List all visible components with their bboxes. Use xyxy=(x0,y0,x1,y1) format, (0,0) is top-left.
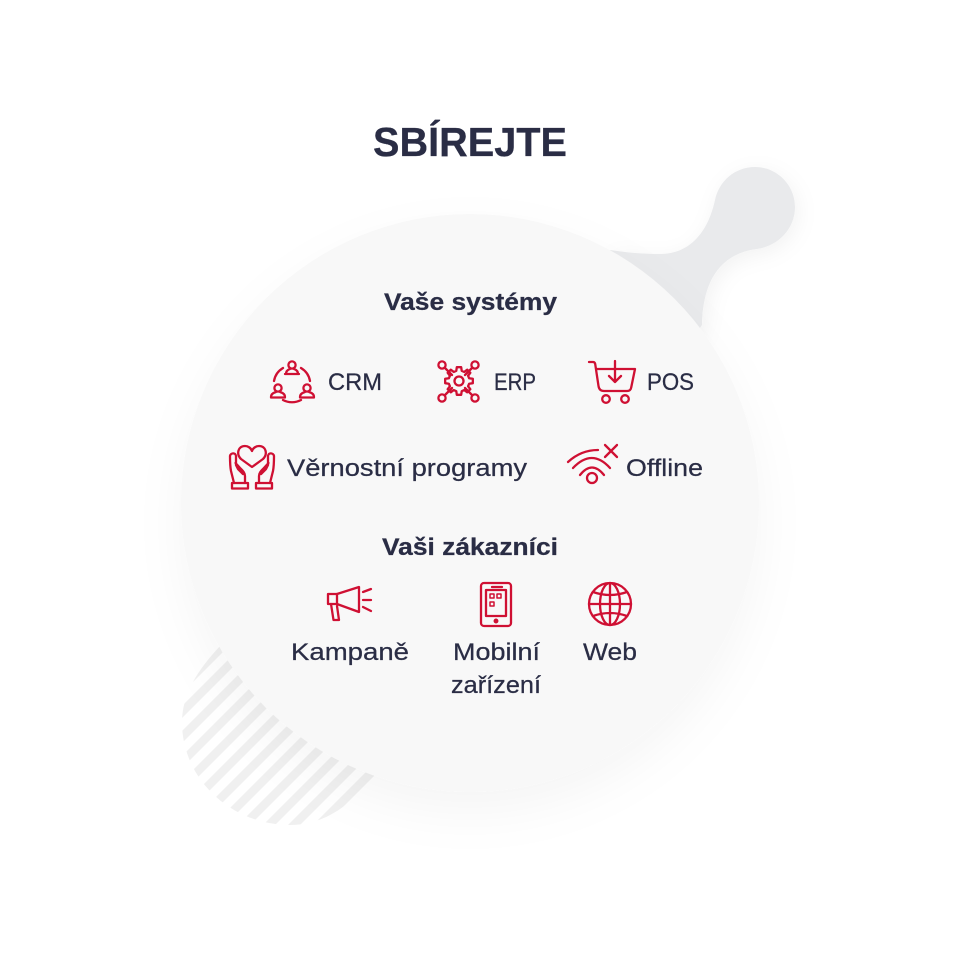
blob: top-right connector shape xyxy=(610,167,795,400)
striped shape: bottom-left xyxy=(182,647,374,825)
icon: CRM people circle xyxy=(271,361,314,402)
label: Mobilní zařízení xyxy=(451,639,541,699)
label: POS: POS xyxy=(647,369,694,396)
icon: megaphone xyxy=(328,587,371,620)
label: Offline: Offline xyxy=(626,455,703,482)
main circle panel xyxy=(181,214,759,792)
icon: hands holding heart xyxy=(230,446,274,488)
label: ERP: ERP xyxy=(494,369,536,396)
icon: wifi offline xyxy=(568,445,617,483)
icon: ERP gear with nodes xyxy=(438,361,479,402)
label: Mobilní zařízení: Mobilní xyxy=(453,639,540,666)
label: Web: Web xyxy=(583,639,637,666)
label: Věrnostní programy: Věrnostní programy xyxy=(287,455,527,482)
icon: mobile device xyxy=(481,583,511,626)
heading: Vaši zákazníci: Vaši zákazníci xyxy=(382,534,558,561)
heading: Vaše systémy: Vaše systémy xyxy=(384,289,558,316)
icon: POS shopping cart xyxy=(589,361,635,403)
icon: globe xyxy=(589,583,631,625)
title: SBÍREJTE xyxy=(373,119,567,165)
label: Kampaně: Kampaně xyxy=(291,639,409,666)
label: Mobilní zařízení: zařízení xyxy=(451,672,541,699)
label: CRM: CRM xyxy=(328,369,382,396)
